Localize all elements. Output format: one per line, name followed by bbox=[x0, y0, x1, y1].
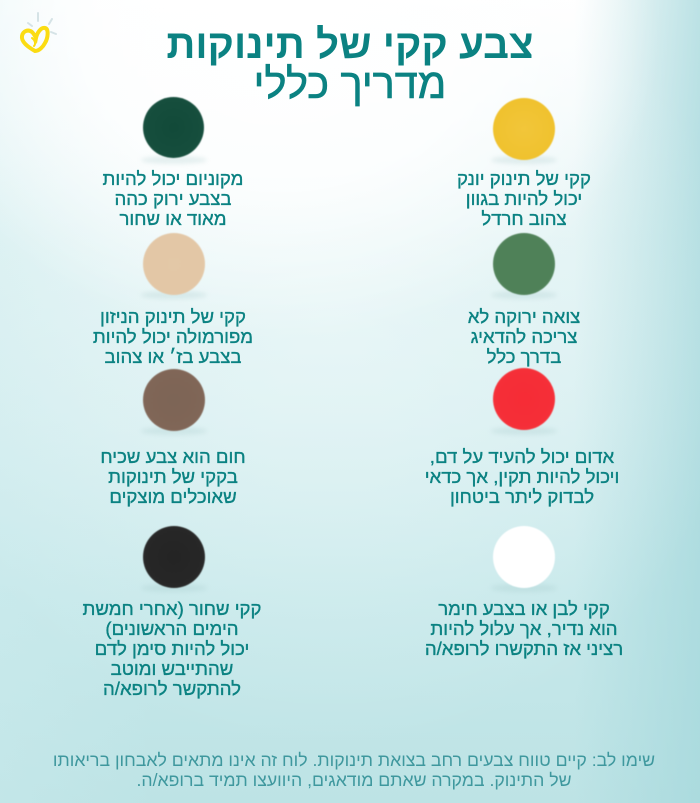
text: black bbox=[82, 598, 261, 699]
footnote: של התינוק. במקרה שאתם מודאגים, היוועצו תמיד ברופא/ה. bbox=[136, 770, 572, 790]
swatch: beige bbox=[143, 233, 205, 295]
text: red: אדום יכול להעיד על דם, bbox=[430, 446, 614, 467]
footnote: שימו לב: קיים טווח צבעים רחב בצואת תינוקות. לוח זה אינו מתאים לאבחון בריאותו bbox=[53, 750, 655, 770]
item: black bbox=[82, 525, 261, 699]
text: red: לבדוק ליתר ביטחון bbox=[450, 486, 594, 507]
text: beige: קקי של תינוק הניזון bbox=[100, 306, 246, 327]
footnote bbox=[53, 750, 655, 790]
text: white bbox=[425, 598, 623, 659]
text: dark green: בצבע ירוק כהה bbox=[114, 188, 232, 209]
subtitle: מדריך כללי bbox=[254, 60, 446, 107]
swatch: medium green bbox=[493, 233, 555, 295]
text: yellow bbox=[457, 168, 591, 229]
text: red: ויכול להיות תקין, אך כדאי bbox=[425, 466, 619, 487]
text: red bbox=[425, 446, 619, 507]
text: dark green: מקוניום יכול להיות bbox=[103, 168, 243, 189]
text: dark green bbox=[102, 168, 243, 229]
text: white: הוא נדיר, אך עלול להיות bbox=[430, 618, 618, 639]
swatch: white bbox=[493, 526, 555, 588]
item: red bbox=[425, 367, 619, 507]
text: black: הימים הראשונים) bbox=[105, 618, 239, 639]
text: medium green: צואה ירוקה לא bbox=[468, 306, 580, 327]
item: dark green bbox=[102, 96, 243, 229]
text: brown bbox=[100, 446, 246, 507]
text: dark green: מאוד או שחור bbox=[120, 208, 226, 229]
title: צבע קקי של תינוקות bbox=[166, 21, 534, 67]
text: white: רציני אז התקשרו לרופא/ה bbox=[425, 638, 623, 659]
text: yellow: קקי של תינוק יונק bbox=[457, 168, 591, 189]
logo: yellow heart bbox=[20, 12, 57, 53]
swatch: black bbox=[143, 526, 205, 588]
swatch: brown bbox=[143, 369, 205, 431]
text: brown: בקקי של תינוקות bbox=[108, 466, 238, 487]
text: yellow: צהוב חרדל bbox=[481, 208, 567, 229]
swatch: dark green bbox=[143, 97, 204, 158]
text: brown: שאוכלים מוצקים bbox=[109, 486, 237, 507]
item: mustard yellow bbox=[457, 97, 591, 229]
text: black: שהתייבש ומוטב bbox=[111, 658, 233, 679]
text: black: יכול להיות סימן לדם bbox=[95, 638, 249, 659]
text: yellow: יכול להיות בגוון bbox=[466, 188, 582, 209]
text: medium green bbox=[468, 306, 580, 367]
item: white bbox=[425, 526, 623, 659]
text: black: קקי שחור (אחרי חמשת bbox=[83, 598, 261, 619]
swatch: yellow bbox=[493, 98, 555, 160]
text: beige bbox=[93, 306, 253, 367]
text: white: קקי לבן או בצבע חימר bbox=[438, 598, 610, 619]
text: brown: חום הוא צבע שכיח bbox=[100, 446, 246, 467]
item: medium green bbox=[468, 232, 580, 367]
swatch: red bbox=[493, 368, 555, 430]
item: beige bbox=[93, 232, 253, 367]
item: brown bbox=[100, 368, 246, 507]
text: black: להתקשר לרופא/ה bbox=[103, 678, 241, 699]
text: beige: מפורמולה יכול להיות bbox=[93, 326, 253, 347]
text: beige: בצבע בז׳ או צהוב bbox=[104, 346, 241, 367]
text: medium green: בדרך כלל bbox=[487, 346, 561, 367]
text: medium green: צריכה להדאיג bbox=[471, 326, 577, 347]
